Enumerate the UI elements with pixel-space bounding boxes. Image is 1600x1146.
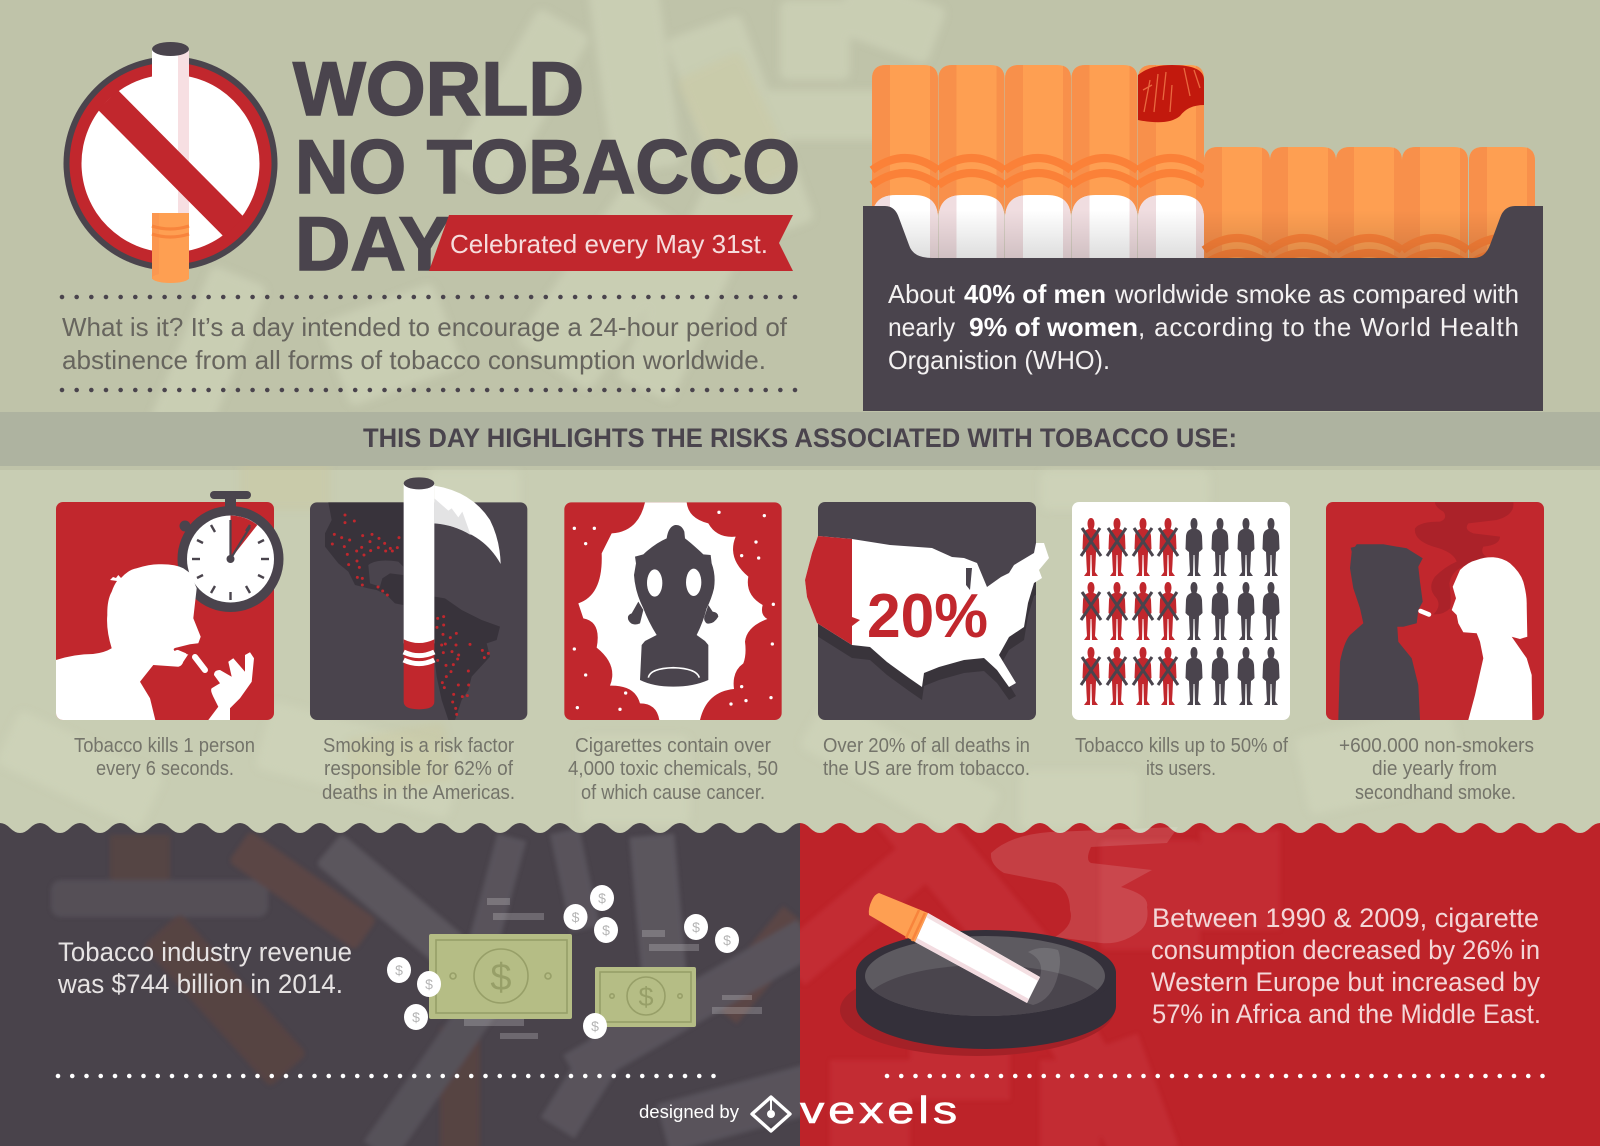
icon: ashtray with cigarette [840, 827, 1178, 1056]
caption 4: Over 20% of all deaths in [823, 735, 1030, 757]
icon: smoker silhouette [56, 564, 254, 720]
coins: $ [692, 919, 700, 935]
coins: $ [425, 976, 433, 992]
heading band: THIS DAY HIGHLIGHTS THE RISKS ASSOCIATED WITH TOBACCO USE: [363, 423, 1237, 453]
caption 6: +600.000 non-smokers [1339, 735, 1534, 757]
smoke plume [1415, 502, 1513, 614]
pictogram: people [1081, 518, 1280, 705]
credit: designed by vexels: vexels [800, 1090, 961, 1132]
coins: $ [598, 890, 606, 906]
caption 2 [322, 735, 515, 804]
caption 6: secondhand smoke. [1355, 782, 1516, 804]
icon: vexels logo [752, 1097, 790, 1131]
caption 4: the US are from tobacco. [823, 758, 1030, 780]
coins: $ [591, 1018, 599, 1034]
panel: consumption (red) [800, 823, 1600, 1146]
caption 3: 4,000 toxic chemicals, 50 [568, 758, 778, 780]
caption 6 [1339, 735, 1534, 804]
panel: smoking prevalence: nearly [888, 312, 955, 342]
icon: no smoking sign with cigarette [64, 42, 278, 283]
heading band [0, 412, 1600, 466]
caption 2: deaths in the Americas. [322, 782, 515, 804]
icon: money bills and coins [387, 885, 762, 1039]
credit: designed by vexels [639, 1090, 961, 1132]
icon: stopwatch [178, 491, 284, 612]
card 5: kills up to 50 percent of users [1072, 502, 1290, 720]
caption 2: Smoking is a risk factor [323, 735, 514, 757]
title: NO TOBACCO [295, 125, 800, 210]
background: cigarette butts texture [0, 0, 1600, 846]
card 3: toxic chemicals [564, 502, 782, 720]
panel: smoking prevalence: 9% of women [969, 312, 1138, 342]
caption 5: Tobacco kills up to 50% of [1075, 735, 1288, 757]
caption 2: responsible for 62% of [324, 758, 513, 780]
credit: designed by vexels: designed by [639, 1102, 739, 1122]
caption 5 [1075, 735, 1288, 780]
text: cigarette consumption: 57% in Africa and the Middle East. [1152, 999, 1541, 1029]
caption 6: die yearly from [1372, 758, 1497, 780]
coins: $ [723, 932, 731, 948]
ribbon: celebrated every May 31st: Celebrated every May 31st. [450, 229, 768, 259]
ribbon: celebrated every May 31st [429, 215, 793, 271]
text: cigarette consumption: Between 1990 & 2009, cigarette [1152, 903, 1539, 933]
icon: cigarette handle [404, 477, 434, 709]
panel: revenue (dark) [0, 823, 1600, 1146]
card 4: 20 percent of US deaths [805, 502, 1049, 720]
icon: cigarette [1420, 611, 1429, 614]
caption 5: its users. [1146, 758, 1216, 780]
text: tobacco industry revenue: was $744 billion in 2014. [57, 969, 343, 999]
coins: $ [395, 962, 403, 978]
title: WORLD [293, 47, 584, 132]
caption 1: every 6 seconds. [96, 758, 234, 780]
dotted rule: bottom [58, 1074, 1544, 1078]
smoke burst [578, 502, 767, 720]
intro text with dotted rules: What is it? It’s a day intended to encourage a 24-hour period of [62, 312, 788, 342]
icon: scythe blade [434, 486, 501, 564]
icon: gas mask [628, 525, 718, 687]
intro text with dotted rules: abstinence from all forms of tobacco consumption worldwide. [62, 345, 766, 375]
text: cigarette consumption: consumption decreased by 26% in [1151, 935, 1540, 965]
card 1: tobacco kills 1 person every 6 seconds [56, 491, 284, 720]
bill large: $ [490, 957, 512, 999]
motion bars [464, 898, 762, 1039]
panel: smoking prevalence: About [888, 279, 956, 309]
woman silhouette [1452, 557, 1532, 720]
text: tobacco industry revenue: Tobacco industry revenue [58, 937, 352, 967]
panel: smoking prevalence: 40% of men [964, 279, 1106, 309]
bill large [429, 934, 572, 1019]
map: United States [805, 536, 1049, 687]
caption 4 [823, 735, 1030, 780]
figure: 20%: 20% [867, 582, 988, 651]
panel: smoking prevalence: worldwide smoke as compared with [1114, 279, 1519, 309]
bill small [595, 967, 696, 1027]
card 2: risk factor in the Americas [310, 477, 527, 720]
text: cigarette consumption: Western Europe but increased by [1151, 967, 1540, 997]
map shadow [818, 582, 1036, 700]
illustration: open cigarette pack [872, 65, 1536, 347]
intro text with dotted rules [62, 297, 797, 390]
coins [387, 885, 739, 1039]
panel: smoking prevalence [863, 206, 1543, 411]
map: Americas [325, 502, 500, 720]
panel: smoking prevalence: Organistion (WHO). [888, 345, 1110, 375]
coins: $ [572, 909, 580, 925]
panel: smoking prevalence: , according to the World Health [1138, 312, 1519, 342]
caption 3 [568, 735, 778, 804]
caption 1: Tobacco kills 1 person [74, 735, 255, 757]
text: cigarette consumption [1151, 903, 1541, 1029]
bill small: $ [638, 982, 654, 1012]
title: DAY [295, 202, 450, 287]
coins: $ [602, 922, 610, 938]
coins: $ [412, 1009, 420, 1025]
title [293, 47, 800, 287]
text: tobacco industry revenue [57, 937, 352, 999]
man silhouette [1338, 544, 1423, 720]
card 6: secondhand smoke [1326, 502, 1544, 720]
caption 3: of which cause cancer. [581, 782, 765, 804]
smoke big [991, 827, 1178, 943]
caption 3: Cigarettes contain over [575, 735, 771, 757]
caption 1 [74, 735, 255, 780]
